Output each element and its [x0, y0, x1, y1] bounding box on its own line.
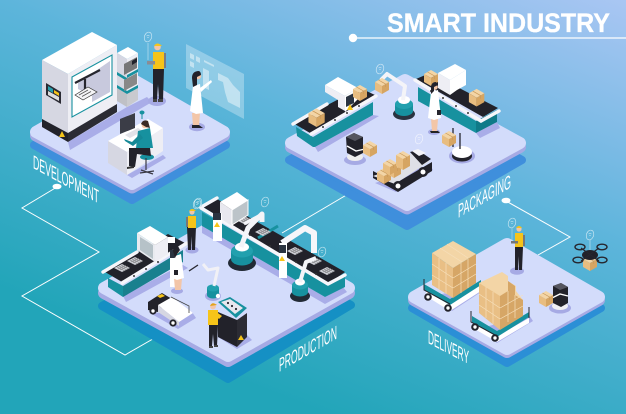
robot: round AGV with box — [442, 128, 475, 164]
robot: delivery carrier with box — [539, 283, 571, 314]
person: woman with tablet — [170, 246, 184, 294]
hologram screen — [186, 44, 244, 119]
person: delivery worker — [510, 226, 525, 275]
server cabinet — [117, 47, 138, 107]
text: DEVELOPMENT — [33, 152, 99, 208]
connector: production to packaging — [282, 187, 360, 233]
icon: wifi above cart — [414, 133, 424, 145]
icon: wifi over worker — [192, 198, 202, 210]
gantry: production left — [137, 226, 175, 262]
platform: development — [34, 78, 226, 200]
desk with monitor and seated worker — [108, 110, 166, 178]
robot arm: production right — [290, 258, 316, 302]
autonomous bed vehicle — [148, 293, 196, 329]
machine: 3D printer — [42, 32, 152, 150]
conveyor left with gantry — [293, 77, 379, 152]
text: DELIVERY — [428, 327, 469, 369]
platform: packaging — [289, 80, 522, 226]
autonomous cart with boxes — [373, 149, 433, 192]
platform: delivery — [412, 244, 601, 363]
control panel — [218, 297, 252, 349]
cart: stacked boxes large — [424, 241, 484, 312]
connector: development to production — [22, 184, 165, 355]
conveyor: production back — [201, 198, 347, 304]
person: worker in yellow vest top — [186, 209, 198, 254]
panel: production — [102, 192, 351, 379]
icon: wifi over robot arm — [375, 63, 385, 75]
icon: wifi above engineer — [143, 31, 153, 60]
connector: packaging to delivery — [502, 198, 570, 255]
drone with box — [573, 229, 607, 271]
text: PRODUCTION — [279, 322, 337, 377]
person: woman at hologram — [189, 71, 212, 131]
panel: delivery — [412, 217, 607, 363]
person: woman inspector — [428, 82, 441, 135]
text: PACKAGING — [458, 171, 511, 223]
conveyor right with gantry — [415, 64, 500, 138]
person: operator at panel — [208, 303, 222, 348]
panel: development — [34, 31, 244, 200]
robot: black carrier with box — [344, 133, 377, 165]
icon: wifi above worker — [507, 217, 517, 240]
robot arm: packaging — [375, 74, 415, 120]
gantry: production middle frame — [279, 228, 314, 278]
platform: production — [102, 218, 351, 379]
small robot arm with gripper — [189, 264, 221, 301]
title underline with dot — [349, 34, 626, 42]
cart: stacked boxes stepped — [471, 272, 533, 343]
title: SMART INDUSTRY — [387, 8, 610, 38]
icon: wifi markers production — [193, 196, 327, 258]
robot arm: production large — [228, 214, 262, 271]
gantry: production back — [213, 192, 248, 241]
conveyor: production left — [103, 234, 188, 302]
panel: packaging — [289, 63, 522, 226]
person: engineer in yellow vest — [147, 44, 166, 106]
